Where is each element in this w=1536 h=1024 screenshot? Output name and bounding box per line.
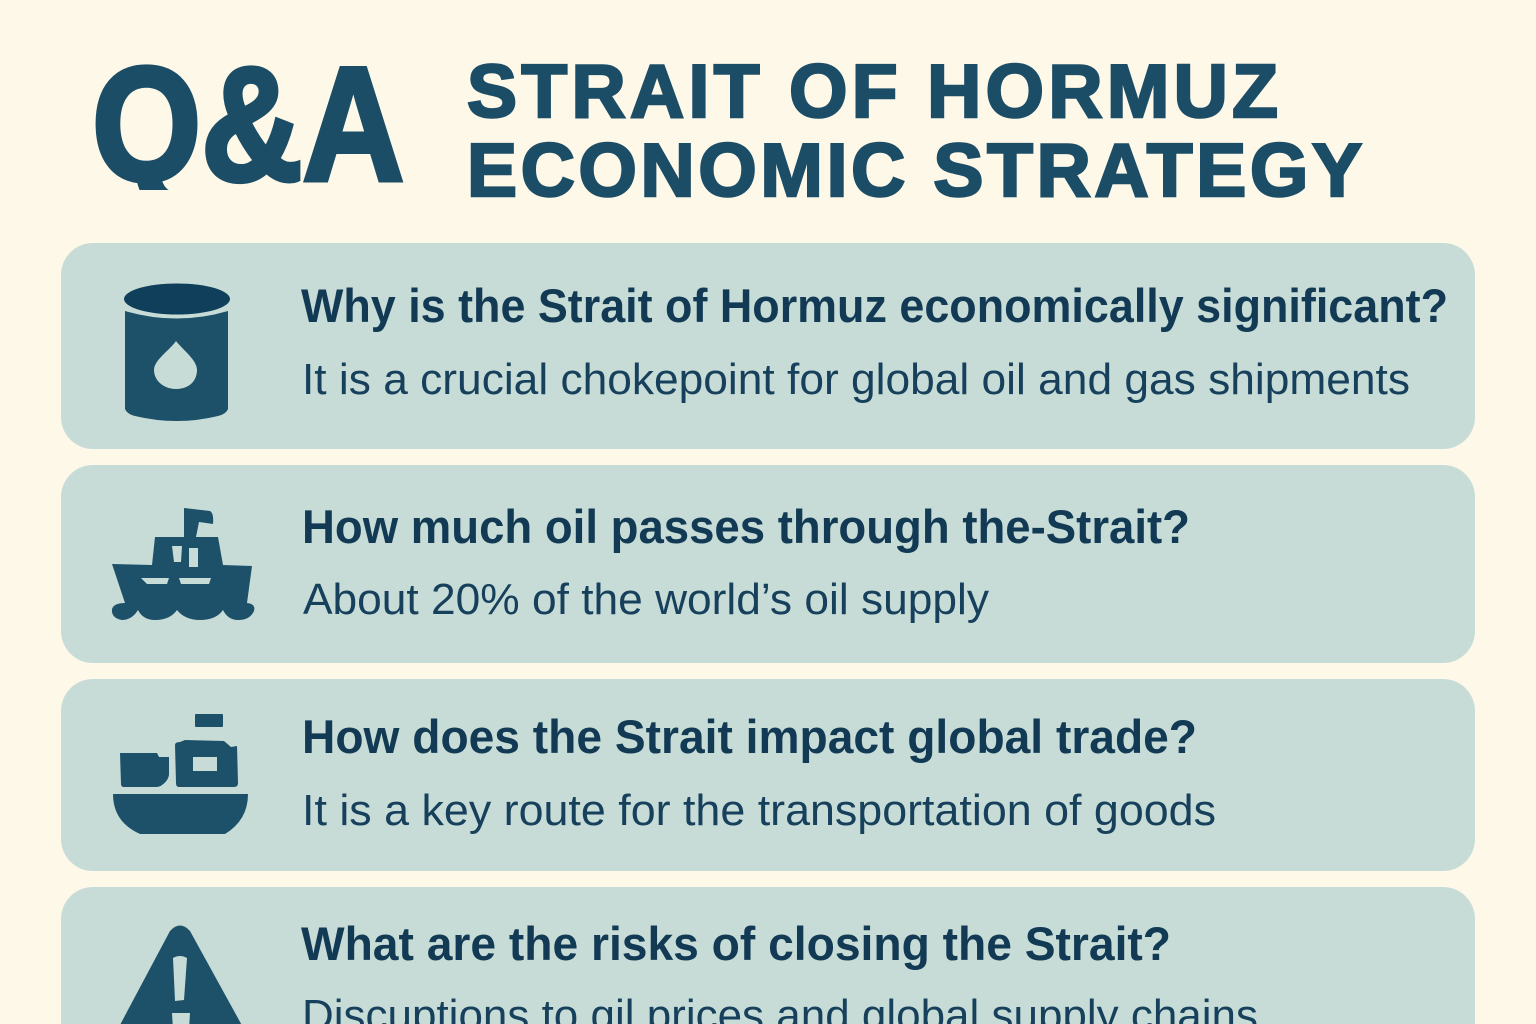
panel: how much oil bbox=[61, 465, 1475, 663]
panel: why significant bbox=[61, 243, 1475, 449]
Q&A heading: Q&A bbox=[92, 34, 404, 215]
icon: tanker ship bbox=[112, 508, 254, 620]
question 3: How does the Strait impact global trade? bbox=[302, 710, 1197, 763]
panel: global trade bbox=[61, 679, 1475, 871]
icon: container ship bbox=[113, 714, 248, 834]
answer 2: About 20% of the world’s oil supply bbox=[303, 575, 989, 624]
title: ECONOMIC STRATEGY bbox=[467, 128, 1362, 212]
title: STRAIT OF HORMUZ bbox=[467, 49, 1278, 133]
answer 1: It is a crucial chokepoint for global oil and gas shipments bbox=[302, 355, 1410, 404]
title bbox=[467, 49, 1362, 212]
answer 3: It is a key route for the transportation of goods bbox=[302, 786, 1216, 835]
icon: warning triangle bbox=[112, 926, 250, 1024]
question 4: What are the risks of closing the Strait? bbox=[301, 917, 1171, 970]
question 2: How much oil passes through the-Strait? bbox=[302, 500, 1190, 553]
question 1: Why is the Strait of Hormuz economically significant? bbox=[301, 279, 1448, 332]
panel: closing risks bbox=[61, 887, 1475, 1024]
icon: oil barrel bbox=[124, 284, 230, 421]
